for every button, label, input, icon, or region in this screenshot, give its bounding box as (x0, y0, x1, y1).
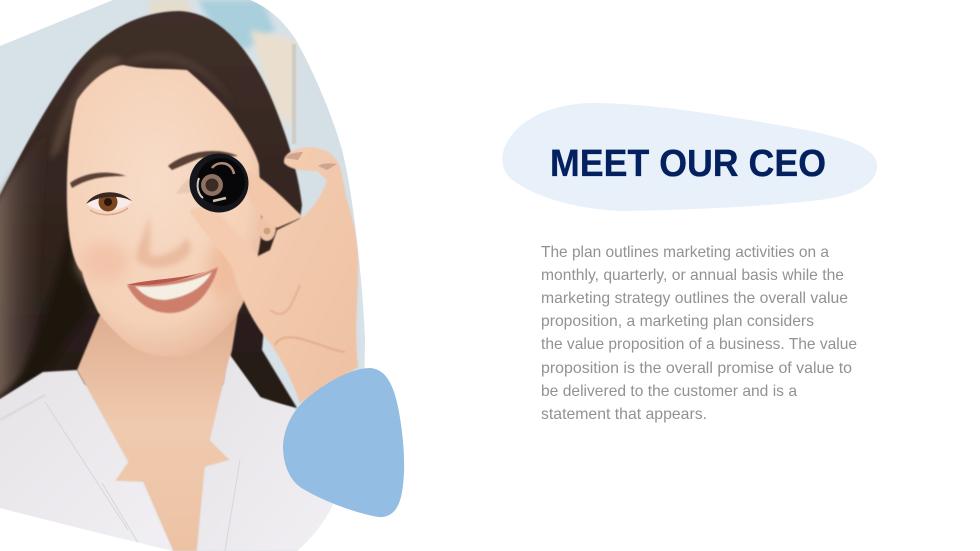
panel: CEO portrait photo (0, 0, 370, 551)
photo background (0, 0, 370, 551)
face (67, 65, 262, 357)
body text block: The plan outlines marketing activities on a (541, 244, 829, 261)
shirt (0, 355, 340, 551)
lens (190, 154, 248, 212)
mouth (127, 267, 218, 313)
body text block: marketing strategy outlines the overall value (541, 290, 848, 307)
body text block: be delivered to the customer and is a (541, 383, 797, 400)
right eyebrow (168, 151, 238, 170)
body text block: proposition, a marketing plan considers (541, 313, 814, 330)
left eye (86, 192, 132, 215)
hair (0, 11, 302, 408)
neck (77, 300, 240, 551)
body text block: monthly, quarterly, or annual basis while the (541, 267, 844, 284)
thumb (190, 208, 258, 272)
body text block: proposition is the overall promise of value to (541, 360, 852, 377)
body text block (541, 244, 857, 423)
left eyebrow (70, 173, 126, 188)
body text block: the value proposition of a business. The value (541, 336, 857, 353)
earring and ear (258, 215, 276, 241)
body text block: statement that appears. (541, 406, 707, 423)
decorative blue blob (283, 368, 404, 517)
title: MEET OUR CEO (550, 143, 826, 185)
title background blob (502, 103, 877, 211)
hand holding lens (190, 147, 358, 403)
nose (136, 215, 191, 268)
index finger (245, 170, 303, 228)
right eye (177, 178, 191, 194)
